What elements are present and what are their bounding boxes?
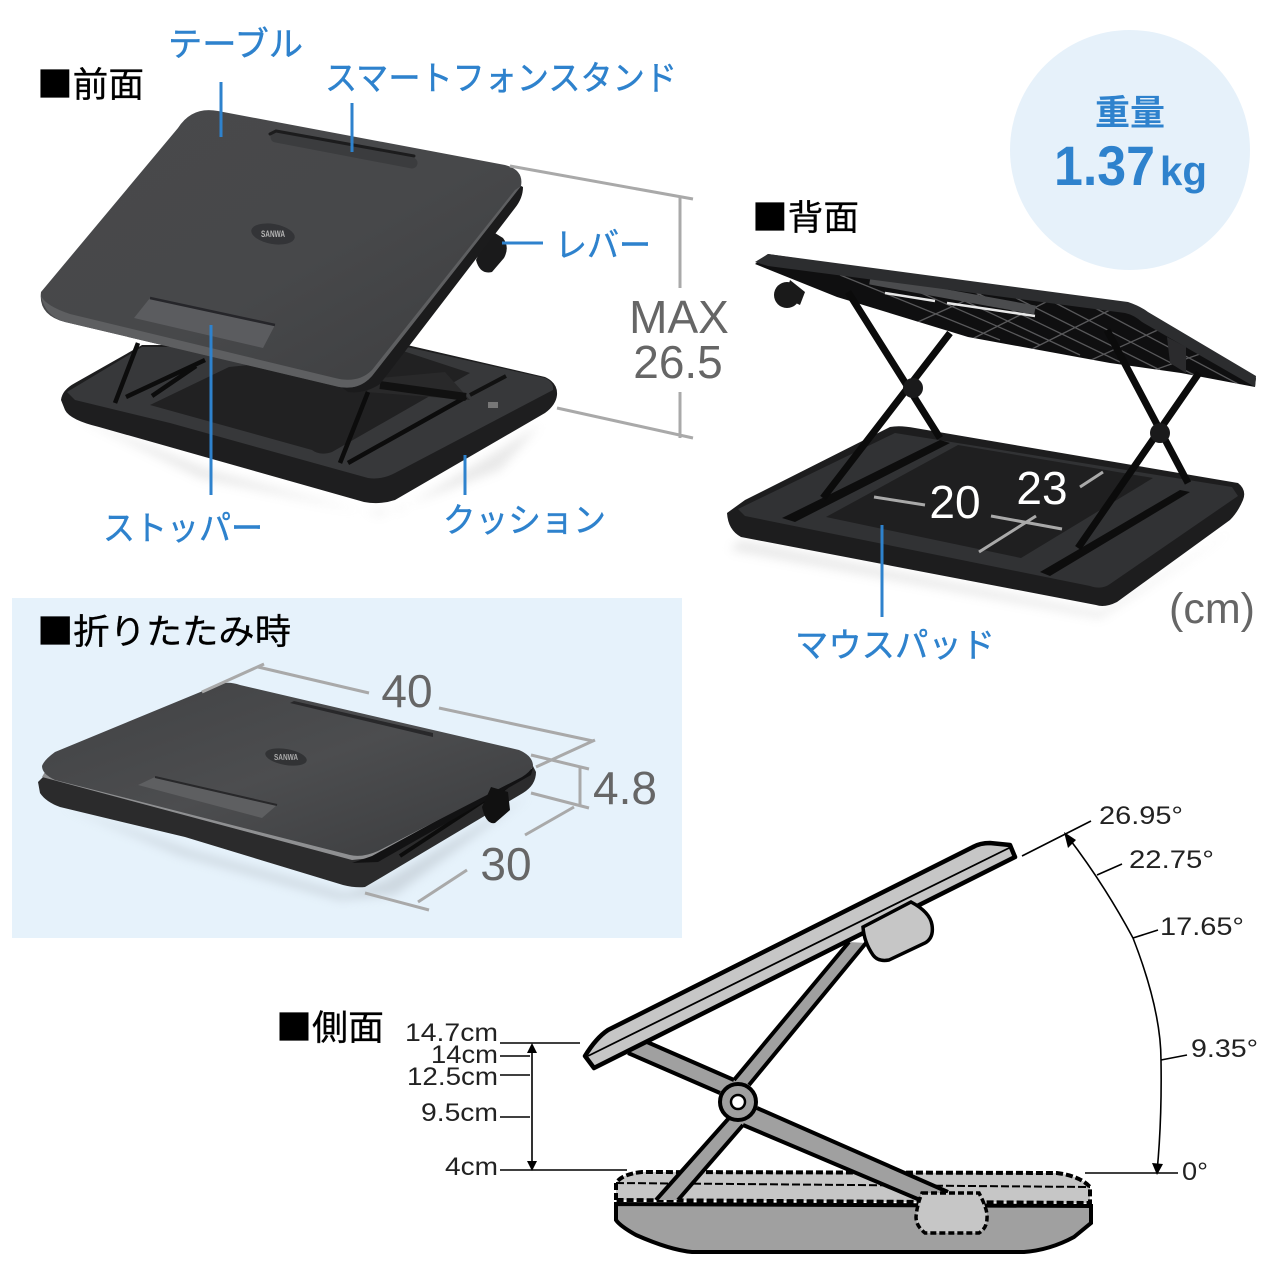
dimension: max height 26.5 — [510, 166, 729, 438]
dimension: max height 26.5: 26.5 — [633, 336, 723, 388]
dimension: mouse pad size: 20 — [929, 476, 981, 528]
angle scale: 0° — [1182, 1158, 1208, 1186]
base tray — [616, 1204, 1091, 1252]
dimensions: folded stand: 4.8 — [593, 762, 657, 814]
dimension: mouse pad size: 23 — [1016, 462, 1068, 514]
dimensions: folded stand: 40 — [381, 665, 433, 717]
strut long — [656, 942, 866, 1200]
label: stopper: ストッパー — [103, 501, 263, 550]
angle scale: 22.75° — [1129, 846, 1214, 874]
label: cushion: クッション — [443, 493, 606, 542]
height scale — [405, 1019, 627, 1181]
table profile — [585, 843, 1015, 1068]
weight badge: 重量 — [1095, 85, 1165, 136]
angle scale: 26.95° — [1099, 802, 1183, 830]
dimension: mouse pad size — [874, 462, 1103, 552]
height scale: 14cm — [431, 1041, 498, 1069]
weight badge: kg — [1160, 148, 1207, 194]
product: folded stand — [38, 683, 536, 900]
pivot — [720, 1084, 756, 1120]
dimensions: folded stand — [202, 664, 657, 910]
product: back view stand — [727, 254, 1260, 618]
dimension: max height 26.5: MAX — [629, 291, 729, 343]
height scale: 14.7cm — [405, 1019, 498, 1047]
height scale: 4cm — [445, 1153, 498, 1181]
label: lever: レバー — [555, 218, 651, 267]
dashed cushion raised — [616, 1172, 1090, 1203]
foot dashed — [916, 1193, 987, 1233]
height scale: 12.5cm — [407, 1063, 498, 1091]
heading: back: ■背面 — [752, 190, 859, 241]
product: folded stand: SANWA — [274, 753, 298, 762]
height scale: 9.5cm — [421, 1099, 498, 1127]
angle scale: 17.65° — [1160, 913, 1244, 941]
heading: side: ■側面 — [276, 1000, 384, 1051]
label: smartphone stand: スマートフォンスタンド — [325, 51, 677, 100]
strut short — [628, 1042, 948, 1200]
dimensions: folded stand: 30 — [480, 838, 532, 890]
lever knob — [863, 902, 932, 960]
angle scale: 9.35° — [1191, 1035, 1258, 1063]
product: front view stand — [41, 110, 557, 515]
unit note: (cm) — [1169, 585, 1255, 633]
heading: folded: ■折りたたみ時 — [37, 604, 291, 655]
label: table: テーブル — [168, 17, 303, 66]
weight badge — [1010, 30, 1250, 270]
weight badge: 1.37 — [1054, 134, 1155, 197]
side view diagram — [585, 843, 1091, 1252]
angle scale — [1022, 802, 1258, 1186]
heading: front: ■前面 — [37, 57, 144, 108]
panel: folded background — [12, 598, 682, 938]
label: table — [168, 17, 303, 137]
product: front view stand: SANWA — [261, 229, 285, 239]
label: mouse pad: マウスパッド — [795, 618, 995, 667]
